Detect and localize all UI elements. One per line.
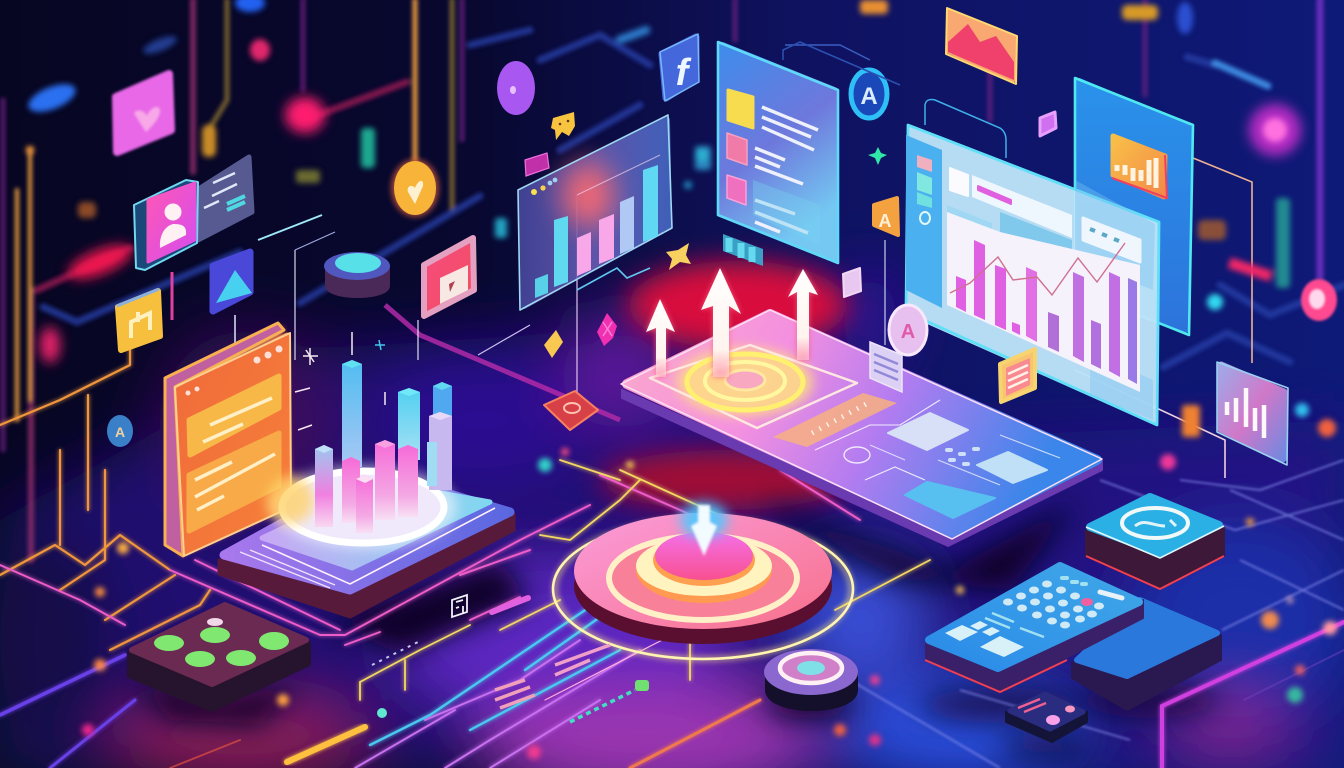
icon: round teal button xyxy=(324,252,390,298)
arrow: right xyxy=(788,269,818,360)
bars xyxy=(315,360,452,533)
icon: small orange A tile xyxy=(874,198,898,235)
floor data strips xyxy=(377,645,649,722)
icon: A profile badge xyxy=(889,305,927,355)
icon: red floor tile xyxy=(544,391,598,430)
icon: yellow note xyxy=(1000,349,1035,402)
icon: small A circle: A xyxy=(115,424,125,440)
icon: lavender note xyxy=(870,342,902,392)
panel: main analytics dashboard xyxy=(906,125,1159,425)
arrow: left xyxy=(646,299,675,377)
glowing magenta orb xyxy=(1249,104,1301,156)
panel: list card xyxy=(718,42,838,263)
icon: pink heart card xyxy=(116,74,171,152)
icon: social network f tile xyxy=(660,34,699,101)
crimson glow behind arrows xyxy=(600,261,850,510)
round small button xyxy=(764,649,858,711)
icon: mountain image card xyxy=(946,8,1017,84)
concentric target xyxy=(650,345,857,428)
background out-of-focus circuit lines xyxy=(3,0,1344,560)
icon: green sparkle xyxy=(868,147,887,165)
icon: A profile badge: A xyxy=(901,321,915,343)
chart panel: floating bar chart xyxy=(518,115,672,310)
dotted floor code xyxy=(372,642,418,665)
icon: A circle badge: A xyxy=(860,83,878,110)
icon: pink tag xyxy=(525,153,549,176)
icon: yellow star xyxy=(666,243,691,270)
icon: purple circle badge xyxy=(497,61,535,115)
icon: floating purple note xyxy=(1040,112,1056,136)
back outline behind list panel xyxy=(783,42,900,85)
red streak glows xyxy=(285,97,325,133)
dark side block xyxy=(1072,600,1221,710)
neon magenta rail xyxy=(385,305,620,420)
icon: yellow diamond xyxy=(544,330,563,358)
pink node xyxy=(1301,279,1337,321)
icon: small orange A tile: A xyxy=(878,211,892,231)
back outline behind dashboard xyxy=(925,100,1006,158)
icon: gold star badge xyxy=(551,112,575,140)
icon: video play tile xyxy=(424,238,474,316)
soft shadows xyxy=(130,500,1220,758)
icon: yellow music tile xyxy=(117,289,160,350)
icon: heart coin xyxy=(391,159,439,217)
panel: orange form card xyxy=(165,323,292,556)
right-side blue circuit lines xyxy=(850,460,1344,768)
thick floor rails xyxy=(0,590,1344,768)
growth arrows xyxy=(646,268,818,377)
calculator keypad device xyxy=(925,566,1143,692)
icon: user profile card xyxy=(134,157,252,270)
glowing ring xyxy=(266,465,457,549)
icon: A circle badge xyxy=(851,70,887,118)
icon: small shield tile xyxy=(843,268,861,297)
small QR glyph xyxy=(452,595,467,617)
platform with 3D bars xyxy=(219,332,514,617)
icon: cyan strip xyxy=(723,234,763,266)
icon: social network f tile: f xyxy=(676,52,692,94)
icon: pink sparkle xyxy=(597,313,617,346)
green button pad xyxy=(128,605,310,711)
arrow: middle xyxy=(701,268,741,377)
pink capsule xyxy=(492,598,528,612)
teal smile box xyxy=(1086,497,1224,589)
small phone device xyxy=(1006,694,1087,742)
panel: blue back panel xyxy=(1075,78,1193,335)
small tiles around tablet xyxy=(544,305,1035,430)
icon: blue play tile xyxy=(213,252,252,311)
icon: small bar chart tile xyxy=(1217,362,1288,465)
sparkles xyxy=(295,332,385,430)
icon: orange bar chart card xyxy=(1112,136,1167,198)
floor circuit lines xyxy=(0,335,930,768)
center target disk xyxy=(553,502,853,659)
tablet device with dashboard xyxy=(621,310,1102,546)
icon: small A circle xyxy=(107,415,133,447)
connector lines xyxy=(172,45,1252,478)
